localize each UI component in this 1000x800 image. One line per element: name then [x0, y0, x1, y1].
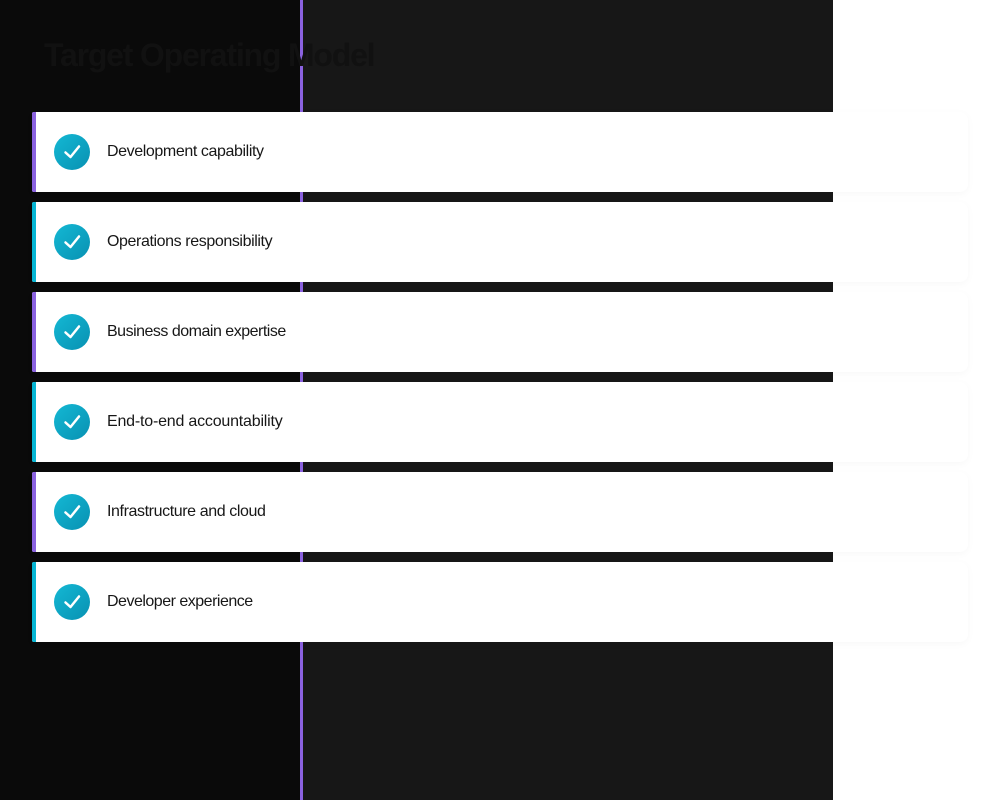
card: Operations responsibility: [32, 202, 968, 282]
card: End-to-end accountability: End-to-end accountability: [107, 413, 283, 430]
card: Developer experience: [32, 562, 968, 642]
card: Business domain expertise: Business domain expertise: [107, 323, 286, 340]
card: Development capability: Development capability: [107, 143, 264, 160]
card: Infrastructure and cloud: [32, 472, 968, 552]
card: Infrastructure and cloud: Infrastructure and cloud: [107, 503, 266, 520]
card: Business domain expertise: [32, 292, 968, 372]
title: Target Operating Model: [44, 37, 374, 73]
card: Operations responsibility: Operations responsibility: [107, 233, 272, 250]
dark left panel: [0, 0, 300, 800]
card: End-to-end accountability: [32, 382, 968, 462]
vertical purple line: [300, 0, 303, 800]
dark right panel: [303, 0, 833, 800]
card: Development capability: [32, 112, 968, 192]
card: Developer experience: Developer experience: [107, 593, 253, 610]
